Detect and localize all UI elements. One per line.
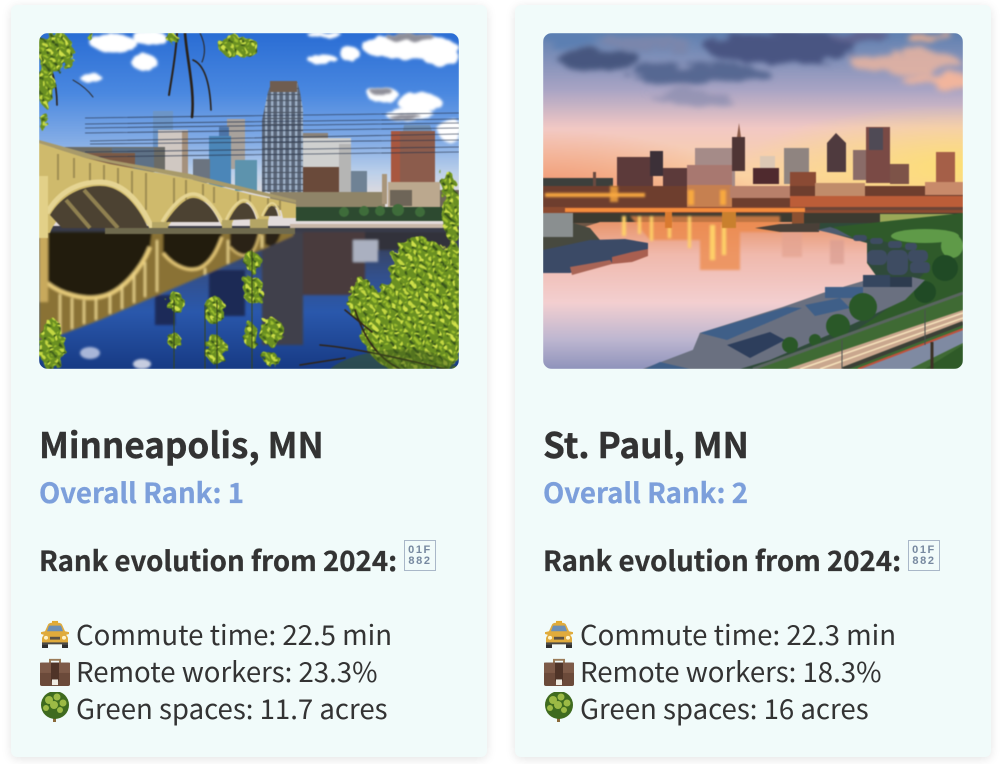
right green bank	[800, 213, 963, 369]
panel: Minneapolis card: Remote workers: 23.3%	[76, 650, 378, 690]
heading: Minneapolis, MN: Minneapolis, MN	[39, 418, 324, 469]
rank evolution label: Rank evolution from 2024:	[543, 539, 901, 579]
heading: St. Paul, MN: St. Paul, MN	[543, 418, 749, 469]
overall rank: Overall Rank: 1	[39, 471, 244, 511]
stat: commute time	[41, 613, 392, 653]
stat: green spaces	[41, 687, 388, 727]
panel: Minneapolis card: Green spaces: 11.7 acres	[76, 687, 388, 727]
stat: commute time	[545, 613, 896, 653]
stat: remote workers	[544, 650, 882, 690]
near barges	[643, 277, 925, 369]
water	[39, 226, 459, 369]
panel: St. Paul card: Remote workers: 18.3%	[580, 650, 882, 690]
icon: missing glyph box	[908, 540, 940, 571]
photo: St. Paul skyline at sunset	[543, 33, 963, 369]
panel: Minneapolis card	[11, 5, 487, 757]
skyline	[543, 178, 613, 198]
branches	[43, 33, 211, 117]
panel: Minneapolis card: Commute time: 22.5 min	[76, 613, 392, 653]
icon: missing glyph box: 882	[408, 555, 432, 567]
icon: missing glyph box	[404, 540, 436, 571]
far barges	[755, 223, 820, 232]
icon: missing glyph box: 01F	[408, 544, 432, 556]
photo: Minneapolis skyline and bridge	[39, 33, 459, 369]
stat: remote workers	[40, 650, 378, 690]
foliage	[36, 32, 469, 373]
panel: St. Paul card: Green spaces: 16 acres	[580, 687, 869, 727]
overall rank: Overall Rank: 2	[543, 471, 748, 511]
buildings	[55, 81, 459, 221]
road and light trails	[753, 293, 963, 369]
panel: St. Paul card	[515, 5, 991, 757]
rank evolution label: Rank evolution from 2024:	[39, 539, 397, 579]
water	[543, 222, 877, 369]
left bank and barges	[543, 222, 600, 250]
reflections	[622, 216, 844, 270]
stat: green spaces	[545, 687, 869, 727]
icon: missing glyph box: 882	[912, 555, 936, 567]
bridge	[39, 143, 296, 233]
reflection	[39, 232, 455, 369]
wires	[85, 113, 459, 157]
panel: St. Paul card: Commute time: 22.3 min	[580, 613, 896, 653]
icon: missing glyph box: 01F	[912, 544, 936, 556]
